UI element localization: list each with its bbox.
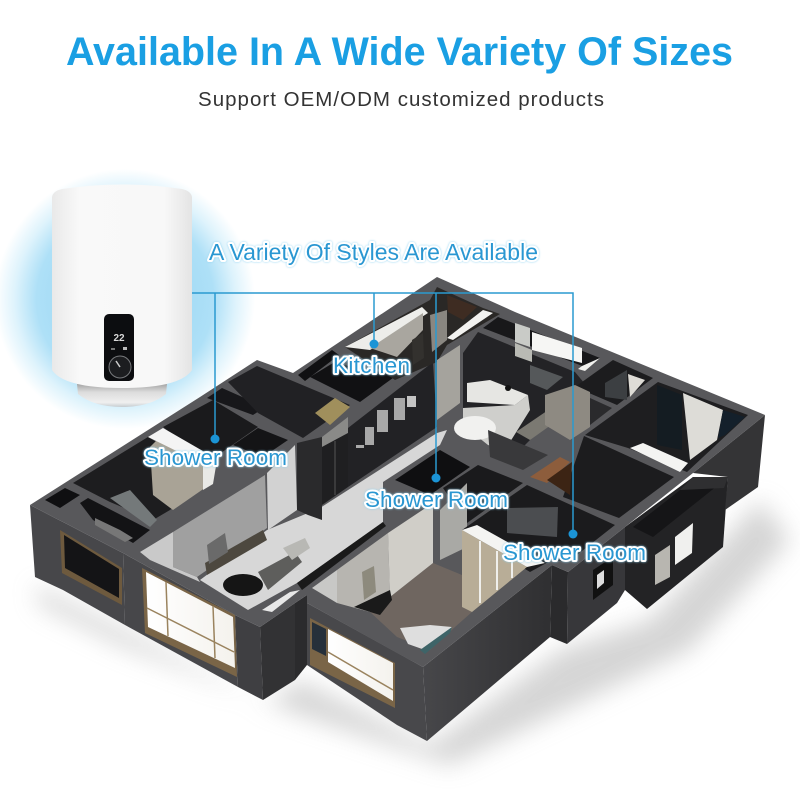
- room: left shower: [45, 400, 288, 543]
- door pillar: [297, 417, 348, 520]
- exterior walls: [30, 415, 765, 741]
- room: dining: [437, 332, 590, 470]
- room: kitchen: [345, 287, 500, 380]
- tv cabinet: [205, 530, 267, 575]
- label: kitchen: Kitchen: [333, 353, 410, 378]
- label: right shower room: Shower Room: [503, 540, 646, 565]
- bed: [400, 625, 452, 650]
- floor shadow: [35, 500, 790, 765]
- callout: connector dots: [210, 340, 578, 538]
- floor plan model: [30, 277, 765, 741]
- room: centre shower: [395, 450, 523, 560]
- room: lower right with wardrobe: [462, 485, 615, 612]
- rooms: corridor and living: [140, 430, 447, 612]
- label: left shower room: Shower Room: [144, 445, 287, 470]
- room: upper right: [483, 317, 653, 440]
- title: Available In A Wide Variety Of Sizes: [66, 30, 733, 74]
- heater body: [52, 184, 192, 388]
- plant: [223, 574, 263, 596]
- roof slab walls: [30, 277, 765, 667]
- product halo: [0, 169, 255, 429]
- room: bedroom: [312, 503, 472, 654]
- nightstand: [354, 590, 392, 615]
- icon: water heater: [52, 184, 192, 407]
- kitchen wall with art: [348, 362, 437, 487]
- label: centre shower room: Shower Room: [365, 487, 508, 512]
- balcony: [633, 477, 728, 537]
- heater base: [77, 384, 167, 407]
- room: upper left: [207, 350, 397, 438]
- subtitle: Support OEM/ODM customized products: [198, 88, 604, 111]
- control panel: 22: [113, 333, 125, 344]
- windows: [60, 523, 693, 708]
- heading: styles label: A Variety Of Styles Are Available: [209, 239, 538, 265]
- callout: connector lines: [192, 293, 573, 534]
- rug: [258, 552, 302, 590]
- control panel: [104, 314, 134, 381]
- corridor rail: [297, 522, 386, 590]
- room: middle right: [530, 436, 674, 518]
- room: right bedroom: [585, 382, 748, 472]
